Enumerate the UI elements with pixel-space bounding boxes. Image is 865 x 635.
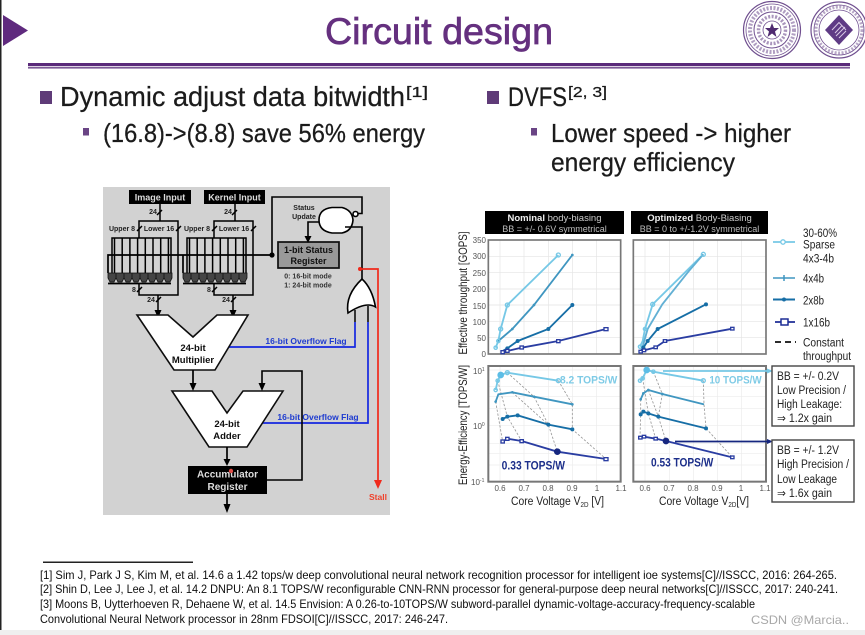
accumulator register: Register (207, 482, 248, 493)
overflow flags: 16-bit Overflow Flag (265, 336, 347, 346)
legend: 2x8b (803, 296, 824, 308)
callout: low precision (772, 366, 854, 426)
throughput ticks: 0 (482, 350, 487, 359)
legend: 1x16b (803, 318, 830, 330)
circuit diagram (103, 187, 390, 515)
stall signal: Stall (369, 492, 387, 502)
overflow flags: 16-bit Overflow Flag (277, 412, 359, 422)
legend: Constant (803, 338, 845, 350)
references: Convolutional Neural Network processor in 28nm FDSOI[C]//ISSCC, 2017: 246-247. (40, 612, 448, 626)
y axis labels: Effective throughput [GOPS] (456, 232, 470, 354)
callout: low precision: High Leakage: (777, 399, 842, 411)
chart group: 0.8 (687, 484, 699, 493)
x axis labels: Core Voltage V (511, 496, 588, 508)
throughput ticks: 350 (473, 236, 487, 245)
text block: left bullets: Dynamic adjust data bitwidth (60, 81, 405, 112)
throughput ticks: 200 (473, 285, 487, 294)
bit labels: 24 (222, 297, 230, 304)
overflow flags (228, 322, 368, 423)
constant throughput lines (496, 373, 606, 459)
text block: left bullets: [1] (406, 84, 428, 101)
legend: throughput (803, 351, 852, 363)
chart group (456, 211, 854, 509)
legend: Sparse (803, 240, 835, 252)
chart group: [V] (736, 496, 749, 508)
legend: 4x4b (803, 274, 824, 286)
accumulator register (188, 466, 267, 494)
callout: high precision: ⇒ 1.6x gain (777, 488, 832, 500)
efficiency ticks: 10 (471, 478, 480, 487)
callout: low precision: Low Precision / (777, 385, 847, 397)
adder: Adder (213, 431, 241, 442)
throughput ticks: 100 (473, 318, 487, 327)
chart group: 1.1 (615, 484, 627, 493)
callout: low precision: BB = +/- 0.2V (777, 371, 839, 383)
stall signal (358, 267, 387, 502)
chart group: 1 (739, 484, 744, 493)
header: optimized (631, 211, 768, 234)
multiplier: 24-bit (180, 343, 207, 354)
chart group: 2D (728, 502, 736, 509)
2x8 series (641, 304, 706, 351)
throughput ticks: 250 (473, 269, 487, 278)
bit labels: 24 (149, 209, 157, 216)
input boxes: Kernel Input (208, 192, 261, 202)
1x16 series (641, 329, 732, 352)
text block: left bullets (40, 81, 428, 148)
x axis labels: 2D (580, 502, 588, 509)
chart group: 1.1 (759, 484, 771, 493)
chart group: Energy-Efficiency [TOPS/W] (456, 365, 470, 485)
mux banks (108, 204, 272, 315)
sparse series (496, 255, 558, 348)
plot: nominal efficiency (488, 366, 621, 482)
bit labels: Lower 16 (219, 226, 249, 233)
bit labels: 24 (147, 297, 155, 304)
legend (773, 228, 852, 363)
bit labels (109, 209, 249, 304)
logo: Tsinghua (744, 2, 800, 58)
status update gate and feedback: Status (293, 205, 315, 212)
input boxes: Image Input (135, 192, 185, 202)
callout: high precision: High Precision / (777, 459, 850, 471)
bit labels: Lower 16 (144, 226, 174, 233)
references (40, 568, 838, 626)
input boxes (129, 190, 265, 204)
text block: right bullets: DVFS (508, 82, 567, 112)
efficiency ticks: 1 (482, 367, 485, 373)
header: optimized: Optimized Body-Biasing (647, 213, 752, 224)
header: optimized: BB = 0 to +/-1.2V symmetrical (640, 224, 759, 234)
label: 8.2 TOPS/W: 8.2 TOPS/W (560, 375, 618, 387)
logos (744, 2, 865, 58)
footnote rule (43, 562, 193, 563)
status register: Register (290, 256, 327, 266)
chart group: 0.6 (639, 484, 651, 493)
efficiency ticks: 10 (473, 422, 482, 431)
text block: right bullets: energy efficiency (551, 147, 735, 177)
logo: second university (811, 2, 865, 58)
efficiency ticks: 0 (482, 422, 485, 428)
multiplier: Multiplier (172, 355, 214, 366)
efficiency ticks (471, 367, 485, 487)
text block: left bullets: (16.8)->(8.8) save 56% energy (103, 118, 425, 148)
text block: right bullets: Lower speed -> higher (551, 118, 791, 148)
label: 0.33 TOPS/W: 0.33 TOPS/W (502, 458, 566, 472)
title: Circuit design (325, 11, 553, 52)
bit labels: Upper 8 (184, 226, 210, 233)
header: nominal: Nominal body-biasing (508, 213, 602, 224)
status register: 1: 24-bit mode (284, 282, 332, 290)
4x4 series (643, 254, 703, 347)
chart group: 0.8 (542, 484, 554, 493)
label: 0.53 TOPS/W: 0.53 TOPS/W (651, 455, 714, 469)
throughput ticks: 150 (473, 302, 487, 311)
status update gate and feedback: Update (292, 214, 316, 221)
plot: nominal throughput (488, 240, 621, 354)
legend: 30-60% (803, 228, 837, 240)
legend: 4x3-4b (803, 254, 834, 266)
title rule (28, 63, 850, 69)
chart group: Core Voltage V (659, 496, 736, 508)
callout: low precision: ⇒ 1.2x gain (777, 413, 832, 425)
2x8 series (503, 305, 572, 351)
bit labels: 8 (132, 287, 136, 294)
arrow: low precision callout (663, 368, 773, 374)
throughput ticks: 50 (477, 334, 487, 343)
chart group: 0.6 (494, 484, 506, 493)
header: nominal (485, 211, 624, 234)
arrow: high precision callout (675, 439, 773, 444)
text block: right bullets: [2, 3] (568, 84, 607, 101)
callout: high precision: Low Leakage (777, 474, 837, 486)
watermark: CSDN @Marcia.. (751, 613, 849, 627)
status register: 0: 16-bit mode (284, 274, 332, 280)
chart group: 0.7 (663, 484, 675, 493)
chart group: 0.9 (711, 484, 723, 493)
adder: 24-bit (214, 419, 241, 430)
icon: section triangle (3, 15, 28, 46)
throughput ticks: 300 (473, 252, 487, 261)
plot: optimized throughput (633, 240, 766, 354)
chart group: 0.9 (566, 484, 578, 493)
callout: high precision: BB = +/- 1.2V (777, 445, 839, 457)
label: 10 TOPS/W: 10 TOPS/W (709, 375, 762, 387)
bit labels: Upper 8 (109, 226, 135, 233)
efficiency ticks: 10 (473, 367, 482, 376)
constant throughput lines (640, 372, 732, 457)
sparse series (640, 254, 703, 347)
bit labels: 24 (224, 209, 232, 216)
status register (278, 242, 339, 290)
OR gate (348, 279, 376, 313)
x axis labels: [V] (588, 496, 604, 508)
callout: high precision (772, 440, 854, 502)
chart group: 1 (595, 484, 600, 493)
status register: 1-bit Status (284, 245, 333, 255)
1x16 series (503, 329, 606, 352)
accumulator register: Accumulator (197, 470, 258, 480)
header: nominal: BB = +/- 0.6V symmetrical (502, 224, 607, 234)
bit labels: 8 (207, 287, 211, 294)
chart group: 0.7 (518, 484, 530, 493)
multiplier (137, 315, 248, 370)
adder (172, 391, 283, 447)
throughput ticks (473, 236, 487, 359)
text block: right bullets (487, 82, 791, 177)
plot: optimized efficiency (633, 366, 766, 482)
4x4 series (498, 255, 572, 341)
efficiency ticks: -1 (480, 478, 485, 484)
accumulator feedback (262, 371, 302, 480)
status update gate and feedback (270, 197, 362, 282)
references: [3] Moons B, Uytterhoeven R, Dehaene W, et al. 14.5 Envision: A 0.26-to-10TOPS/W subword-parallel dynamic-voltage-accuracy-frequency-scalable (40, 597, 755, 611)
